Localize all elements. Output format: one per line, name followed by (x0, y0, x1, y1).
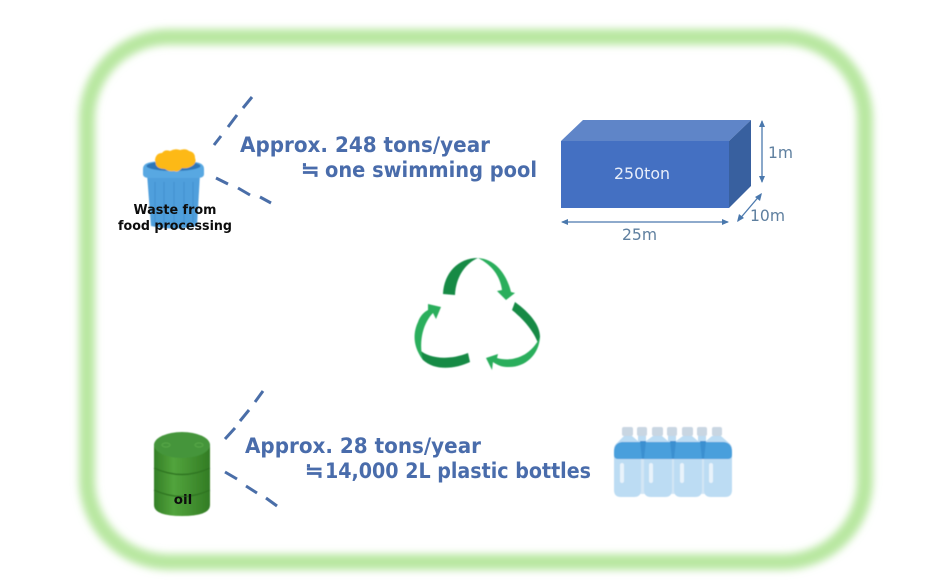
text: approx 28 tons per year: 14,000 2L plastic bottles (325, 459, 591, 484)
dimension labels (622, 143, 793, 244)
text: approx 28 tons per year: Approx. 28 tons/year (245, 434, 481, 459)
icon: recycling arrows (415, 258, 540, 370)
dashed lines from bucket (214, 97, 271, 203)
dimension labels: 10m (750, 206, 785, 225)
label: waste from food processing: Waste from (134, 202, 216, 218)
dimension labels: 1m (768, 143, 793, 162)
bottle bodies (614, 441, 732, 497)
swimming pool box: 250ton (614, 164, 670, 183)
dimension labels: 25m (622, 225, 657, 244)
icon: waste bucket with food (143, 149, 204, 229)
text: approx 248 tons per year: one swimming pool (325, 158, 537, 183)
label: waste from food processing (118, 202, 232, 234)
text: approx 248 tons per year (240, 133, 537, 184)
text: approx 248 tons per year: Approx. 248 tons/year (240, 133, 490, 158)
text: approx 28 tons per year (245, 434, 591, 485)
dashed lines from drum (225, 391, 277, 506)
label: waste from food processing: food processing (118, 218, 232, 234)
icon: plastic bottles (614, 427, 732, 497)
text: approx 28 tons per year: ≒ (305, 453, 323, 485)
text: approx 248 tons per year: ≒ (301, 152, 319, 184)
label: oil: oil (174, 492, 192, 508)
icon: oil drum (154, 432, 210, 516)
swimming pool box (561, 120, 751, 208)
dimension arrows and labels (561, 120, 765, 225)
green rounded frame (87, 37, 865, 562)
